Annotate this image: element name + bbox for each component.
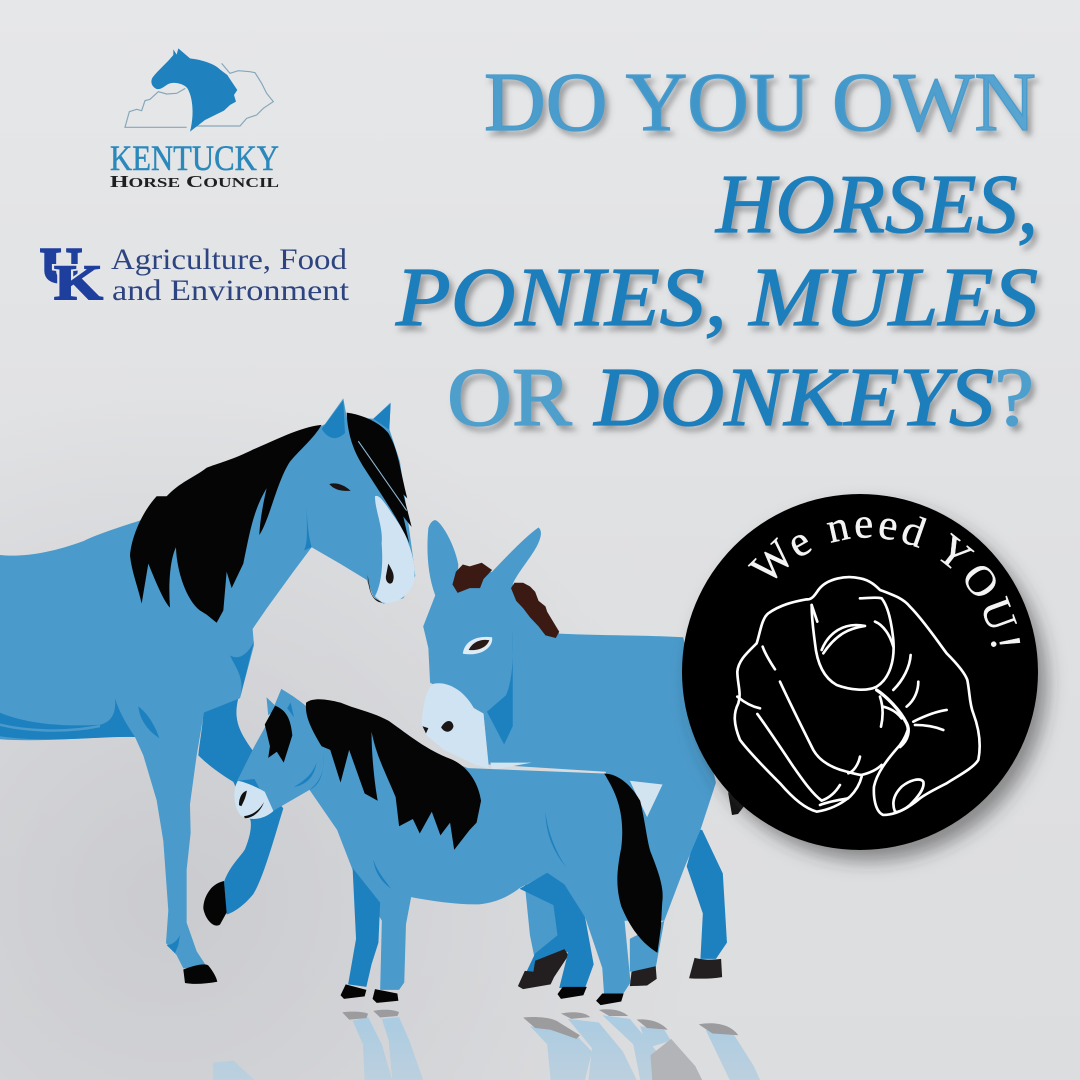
hand outline (818, 577, 980, 815)
black circle (682, 494, 1038, 850)
donkey far rear leg (687, 830, 727, 959)
wordmark: Horse Council: H ORSE C OUNCIL (110, 172, 279, 191)
knuckle creases (877, 690, 908, 747)
horse nostril and mouth (368, 564, 394, 603)
icon: UK monogram: K (54, 254, 103, 310)
illustration: horse (0, 398, 415, 984)
donkey far legs (525, 884, 664, 972)
reflection of animals on floor (213, 1009, 760, 1080)
horse belly shadow (0, 698, 135, 739)
hoof reflections (342, 1009, 738, 1039)
donkey hooves (518, 949, 722, 989)
icon: pointing hand (735, 577, 980, 815)
index fingertip (812, 598, 894, 690)
text: and Environment: and Environment (112, 274, 350, 307)
donkey inner shadow leg (527, 884, 568, 972)
badge: We need YOU! (679, 492, 1060, 874)
pony hooves (341, 984, 624, 1005)
illustration: donkey (421, 520, 727, 989)
thumbnail (893, 780, 924, 812)
horse body and head (0, 398, 415, 968)
wordmark: Kentucky: KENTUCKY (110, 138, 279, 178)
donkey muzzle (421, 683, 489, 769)
title line 2: HORSES, (715, 158, 1038, 251)
donkey body and head (423, 520, 716, 921)
illustration: pony (234, 689, 663, 1005)
pony body and head (237, 689, 631, 994)
pony tail (604, 774, 663, 953)
horse blaze (375, 496, 415, 603)
pony shading (287, 703, 567, 889)
title line 1: DO YOU OWN (484, 56, 1036, 149)
horse hooves (183, 881, 227, 984)
title line 3: PONIES, MULES (395, 251, 1038, 344)
pony mane (306, 699, 481, 850)
logo: Kentucky Horse Council (110, 48, 279, 191)
icon: UK monogram (40, 237, 103, 310)
donkey neck shading (487, 630, 513, 744)
pony front dark leg (348, 868, 380, 987)
pony muzzle (234, 781, 273, 819)
horse eye (329, 483, 351, 491)
icon: UK monogram: K (54, 254, 103, 310)
donkey tail tuft (728, 792, 745, 815)
icon: Kentucky outline with horse head (125, 48, 273, 132)
horse mane (130, 425, 322, 623)
logo: UK Agriculture, Food and Environment (40, 237, 350, 310)
curved text: We need YOU! (748, 516, 1020, 647)
finger lines (780, 682, 882, 775)
title (395, 56, 1038, 444)
donkey nostrils (423, 721, 454, 734)
horse raised foreleg (198, 698, 283, 914)
pony rear dark leg (520, 873, 594, 988)
pony forelock (265, 706, 292, 763)
pony ears (266, 697, 278, 715)
text: Agriculture, Food: Agriculture, Food (111, 243, 347, 276)
title line 4: OR DONKEYS ? (447, 351, 1034, 444)
horse chest and shoulder shading (138, 400, 391, 953)
donkey light patches (490, 763, 663, 817)
donkey eye (463, 637, 492, 654)
icon: UK monogram: U (40, 237, 82, 293)
donkey mane (452, 563, 559, 638)
pony nostril and mouth (239, 791, 264, 818)
horse forelock (347, 413, 412, 543)
